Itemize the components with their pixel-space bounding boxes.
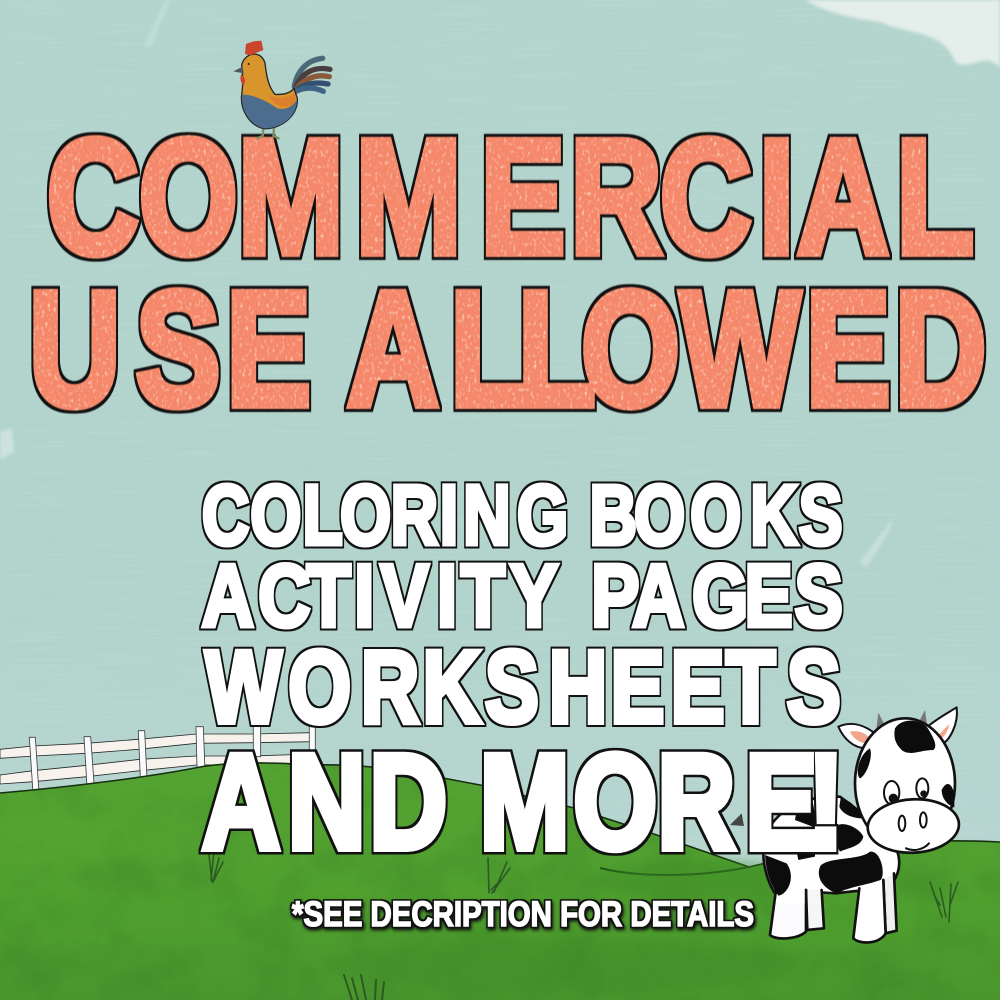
cow tail tuft bbox=[730, 813, 744, 826]
cow head bbox=[855, 718, 955, 848]
rooster bbox=[233, 41, 330, 138]
line: ACTIVITY PAGES: ACTIVITY PAGES bbox=[202, 547, 843, 646]
heading line: COMMERCIAL: COMMERCIAL bbox=[47, 106, 974, 288]
green grass hill bbox=[0, 763, 1000, 1000]
white fence bbox=[0, 723, 315, 798]
cow back legs bbox=[806, 890, 824, 930]
title: COMMERCIAL USE ALLOWED bbox=[29, 106, 986, 440]
line: AND MORE!: AND MORE! bbox=[202, 727, 844, 877]
leg seams hidden bbox=[777, 877, 882, 903]
rooster comb, beak, eye bbox=[245, 41, 263, 55]
rooster body bbox=[241, 54, 297, 129]
grass tufts bbox=[209, 852, 958, 1000]
cow body bbox=[763, 797, 899, 893]
rooster tail bbox=[294, 58, 330, 92]
cow front legs bbox=[883, 873, 897, 933]
heading line: USE ALLOWED: USE ALLOWED bbox=[29, 258, 986, 440]
cow muzzle bbox=[866, 797, 960, 855]
cow bbox=[730, 707, 960, 943]
footnote: *SEE DECRIPTION FOR DETAILS bbox=[292, 895, 754, 934]
product list bbox=[202, 468, 844, 877]
cow spots bbox=[765, 795, 883, 896]
line: COLORING BOOKS: COLORING BOOKS bbox=[202, 468, 842, 562]
rooster legs bbox=[257, 128, 279, 138]
cow eyes bbox=[884, 781, 899, 804]
line: WORKSHEETS: WORKSHEETS bbox=[205, 631, 841, 744]
cow ears and horns bbox=[876, 713, 886, 733]
